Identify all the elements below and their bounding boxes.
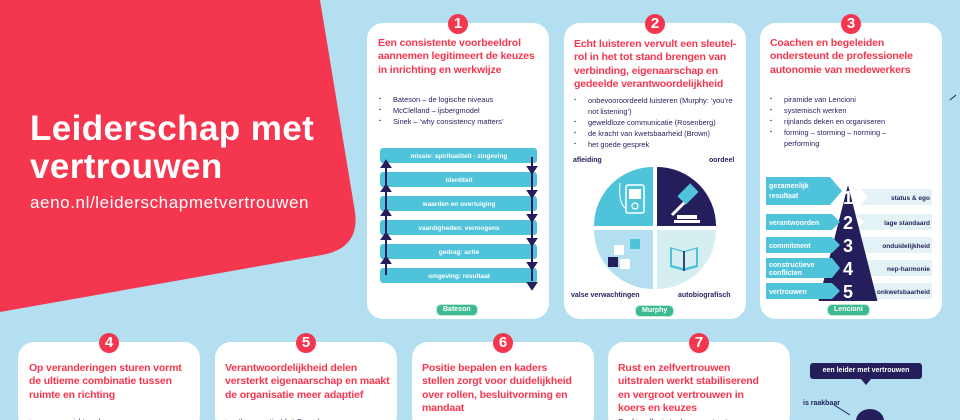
label: is raakbaar: is raakbaar [803, 400, 840, 407]
chart: Lencioni pyramid: gezamenlijk [769, 183, 809, 190]
icon: puzzle [630, 239, 640, 249]
icon: gavel [672, 199, 688, 215]
icon: music player [626, 185, 644, 213]
chart: Lencioni pyramid: status & ego [891, 195, 930, 202]
chart: logical levels: vaardigheden: vermogens [419, 225, 500, 232]
bullets 3: forming – storming – norming – performing [784, 128, 886, 148]
badge 3: 3 [847, 15, 855, 32]
heading 5 [225, 362, 390, 401]
heading 2: Echt luisteren vervult een sleutel- [574, 38, 736, 50]
chart: Lencioni pyramid: verantwoorden [769, 220, 819, 227]
tag Bateson: Bateson [443, 306, 471, 313]
bullets 2: onbevooroordeeld luisteren (Murphy: ‘you’re not listening’) [588, 96, 733, 116]
chart: logical levels: waarden en overtuiging [422, 201, 496, 208]
bullets 1: Sinek – ‘why consistency matters’ [393, 117, 504, 126]
heading 2: verbinding, eigenaarschap en [574, 65, 718, 77]
chart: Lencioni pyramid: constructieve [769, 262, 815, 269]
badge 2 [645, 14, 665, 34]
title: vertrouwen [30, 147, 223, 186]
chart: Lencioni pyramid: 3 [843, 236, 853, 256]
heading 3: ondersteunt de professionele [770, 50, 913, 62]
bullets 2: het goede gesprek [588, 140, 649, 149]
heading 5: versterkt eigenaarschap en maakt [225, 375, 389, 387]
bullets 3 [770, 95, 886, 148]
tag Lencioni [827, 304, 870, 316]
heading 3 [770, 37, 913, 76]
heading 7 [618, 362, 759, 414]
chart: Lencioni pyramid: lage standaard [884, 220, 930, 227]
chart: logical levels: identiteit [445, 177, 473, 184]
heading 7: en vergroot vertrouwen in [618, 389, 744, 401]
heading 3: Coachen en begeleiden [770, 37, 884, 49]
callout: een leider met vertrouwen: een leider met vertrouwen [823, 367, 909, 374]
panel: card 2 [564, 23, 746, 319]
chart: logical levels: missie: spiritualiteit - zingeving [411, 153, 507, 160]
bullets 2 [574, 96, 733, 149]
tag Lencioni: Lencioni [834, 306, 863, 313]
heading 5: Verantwoordelijkheid delen [225, 362, 357, 374]
chart: logical levels [380, 148, 538, 291]
panel: card 6 [412, 342, 594, 420]
badge 7 [689, 333, 709, 353]
badge 1 [448, 14, 468, 34]
chart: Lencioni pyramid: commitment [769, 243, 811, 250]
chart: Lencioni pyramid: conflicten [769, 270, 802, 277]
badge 2: 2 [651, 15, 659, 32]
heading 6: stellen zorgt voor duidelijkheid [422, 375, 572, 387]
decorative arrow right [950, 94, 956, 100]
url: aeno.nl/leiderschapmetvertrouwen [30, 193, 309, 212]
badge 5 [296, 333, 316, 353]
chart: Lencioni pyramid: 1 [843, 188, 853, 208]
heading 1 [378, 37, 535, 76]
heading 3: autonomie van medewerkers [770, 64, 910, 76]
bullets 2: geweldloze communicatie (Rosenberg) [588, 118, 716, 127]
bullets 3: piramide van Lencioni [784, 95, 856, 104]
title [30, 109, 314, 186]
heading 4: ruimte en richting [29, 389, 115, 401]
bullets 3: rijnlands deken en organiseren [784, 117, 885, 126]
chart: logical levels: gedrag: actie [439, 249, 480, 256]
badge 7: 7 [695, 334, 703, 351]
heading 7: uitstralen werkt stabiliserend [618, 375, 759, 387]
panel: card 3 [760, 23, 942, 319]
heading 4 [29, 362, 182, 401]
tag Murphy: Murphy [642, 307, 667, 314]
badge 5: 5 [302, 334, 310, 351]
bullets 2: de kracht van kwetsbaarheid (Brown) [588, 129, 710, 138]
chart: listening pie [594, 167, 716, 289]
badge 1: 1 [454, 15, 462, 32]
bullets 3: systemisch werken [784, 106, 846, 115]
heading 6 [422, 362, 572, 414]
heading 1: aannemen legitimeert de keuzes [378, 50, 535, 62]
heading 2 [574, 38, 736, 90]
tag Murphy [635, 305, 674, 317]
chart: Lencioni pyramid: 2 [843, 213, 853, 233]
heading 4: de ultieme combinatie tussen [29, 375, 172, 387]
badge 6 [493, 333, 513, 353]
heading 1: Een consistente voorbeeldrol [378, 37, 521, 49]
heading 4: Op veranderingen sturen vormt [29, 362, 182, 374]
chart: Lencioni pyramid [766, 177, 932, 301]
callout: een leider met vertrouwen [810, 363, 922, 385]
heading 2: rol in het tot stand brengen van [574, 51, 726, 63]
heading 2: gedeelde verantwoordelijkheid [574, 78, 723, 90]
chart: Lencioni pyramid: resultaat [769, 193, 799, 200]
heading 7: koers en keuzes [618, 402, 697, 414]
badge 4: 4 [105, 334, 113, 351]
panel: card 1 [367, 23, 549, 319]
badge 4 [99, 333, 119, 353]
chart: Lencioni pyramid: nep-harmonie [887, 266, 930, 273]
heading 6: mandaat [422, 402, 464, 414]
icon: book [670, 247, 698, 271]
badge 6: 6 [499, 334, 507, 351]
heading 6: over rollen, besluitvorming en [422, 389, 567, 401]
heading 1: in inrichting en werkwijze [378, 64, 501, 76]
heading 7: Rust en zelfvertrouwen [618, 362, 730, 374]
title: Leiderschap met [30, 109, 314, 148]
chart: Lencioni pyramid: 4 [843, 259, 853, 279]
panel: card 2: autobiografisch [678, 292, 731, 299]
bullets 1: Bateson – de logische niveaus [393, 95, 493, 104]
heading 6: Positie bepalen en kaders [422, 362, 547, 374]
labels: afleiding [573, 157, 602, 164]
illustration: leader head [834, 405, 884, 420]
panel: card 4 [18, 342, 200, 420]
bullets 1 [379, 95, 504, 126]
panel: card 5 [215, 342, 397, 420]
chart: Lencioni pyramid: onduidelijkheid [882, 243, 930, 250]
heading 5: de organisatie meer adaptief [225, 389, 363, 401]
chart: Lencioni pyramid: vertrouwen [769, 289, 807, 296]
panel: card 7 [608, 342, 790, 420]
chart: Lencioni pyramid: onkwetsbaarheid [877, 289, 930, 296]
panel: card 2: valse verwachtingen [571, 292, 639, 299]
bullets 1: McClelland – ijsbergmodel [393, 106, 480, 115]
red title shape [0, 0, 356, 312]
chart: logical levels: omgeving: resultaat [428, 273, 491, 280]
tag Bateson [436, 304, 478, 316]
panel: card 2: oordeel [709, 157, 734, 164]
badge 3 [841, 14, 861, 34]
